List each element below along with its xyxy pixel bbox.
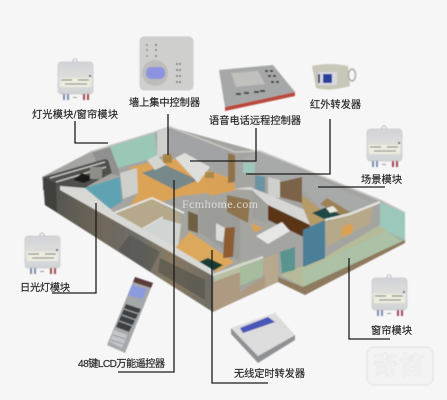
bathroom <box>140 218 181 250</box>
balcony floor <box>280 225 402 287</box>
leader lines <box>52 114 390 383</box>
central orange floor <box>205 178 236 196</box>
blue panel <box>255 175 265 192</box>
brown shelf <box>223 227 235 258</box>
teal partition <box>85 177 122 210</box>
back wall <box>168 127 235 172</box>
side table <box>163 154 172 163</box>
label: voice phone controller: 语音电话远程控制器 <box>209 114 301 127</box>
icon: light/curtain module <box>58 59 93 100</box>
armchair <box>147 155 166 170</box>
white band under wood <box>233 187 310 225</box>
left dark column <box>43 177 57 212</box>
wooden door <box>188 211 198 233</box>
white partition <box>120 168 138 199</box>
middle grey wall <box>252 190 267 223</box>
terrace slats <box>50 162 106 182</box>
lower right front base <box>213 272 265 312</box>
bedroom floor <box>302 195 327 225</box>
pillows <box>326 206 338 213</box>
watermark logo: 奇笛 <box>373 352 425 380</box>
wall cap strip <box>60 186 213 276</box>
glass window <box>110 133 157 168</box>
top edge wall cap <box>90 127 405 213</box>
lower left room <box>115 198 182 246</box>
icon: voice phone controller <box>219 65 295 111</box>
teal glass doors <box>280 247 295 273</box>
dark green rug <box>199 258 223 271</box>
living room floor <box>125 158 236 214</box>
green bed <box>312 207 343 222</box>
teal glass center <box>243 163 255 173</box>
lower room glass left <box>213 263 240 296</box>
bed headboard <box>320 198 350 216</box>
icon: LCD remote control <box>107 277 153 353</box>
icon: scene module <box>367 126 402 167</box>
balcony end glass <box>380 202 405 240</box>
icon: infrared repeater <box>312 64 356 90</box>
label: wireless timer repeater: 无线定时转发器 <box>234 367 305 380</box>
balcony base <box>278 240 405 295</box>
sofa <box>175 153 210 183</box>
icon: fluorescent light module <box>25 233 60 274</box>
room wall caps <box>114 198 184 213</box>
white cabinet <box>216 223 225 242</box>
grey hall wall <box>198 200 240 262</box>
orange side room <box>342 223 353 237</box>
icon: wireless timer repeater <box>231 313 295 363</box>
dark furniture <box>158 258 205 300</box>
terrace dark object <box>73 173 95 183</box>
carpet <box>142 165 198 190</box>
icon: curtain module <box>372 275 407 316</box>
outer left face <box>43 177 213 312</box>
label: light/curtain module: 灯光模块/窗帘模块 <box>32 108 118 121</box>
bathroom wall cap <box>140 217 163 230</box>
left corner wall <box>92 147 120 176</box>
floor plan 3D house <box>42 127 405 312</box>
watermark logo <box>367 347 433 385</box>
pillar <box>263 253 278 288</box>
base floor <box>42 127 405 312</box>
label: LCD remote control: 48键LCD万能遥控器 <box>78 357 165 370</box>
label: infrared repeater: 红外转发器 <box>310 98 361 111</box>
wood wardrobe <box>280 177 302 203</box>
central door <box>228 153 235 183</box>
grey blotches <box>118 235 160 272</box>
white bed <box>256 222 290 244</box>
label: scene module: 场景模块 <box>361 173 402 186</box>
tan side wall <box>325 205 373 247</box>
label: wall controller: 墙上集中控制器 <box>129 96 200 109</box>
middle wood wall <box>227 195 250 223</box>
upper right back wall <box>243 152 370 213</box>
white wall <box>268 177 280 198</box>
blue glass doors <box>303 220 325 267</box>
balcony front glass <box>303 222 405 287</box>
dark brown wall <box>268 205 310 240</box>
terrace rack <box>90 167 102 179</box>
small orange floor <box>250 223 263 233</box>
wall beside glass <box>157 128 168 157</box>
label: curtain module: 窗帘模块 <box>371 324 412 337</box>
second table <box>205 172 214 179</box>
icon: wall controller <box>140 37 193 90</box>
right cap <box>213 257 263 275</box>
watermark in house: Fcmhome.com <box>182 197 259 211</box>
hall floor <box>175 232 234 272</box>
left dark terrace <box>43 159 112 190</box>
lower room glass <box>240 258 263 286</box>
label: fluorescent light module: 日光灯模块 <box>20 281 70 294</box>
room wall caps upper right <box>325 202 380 220</box>
